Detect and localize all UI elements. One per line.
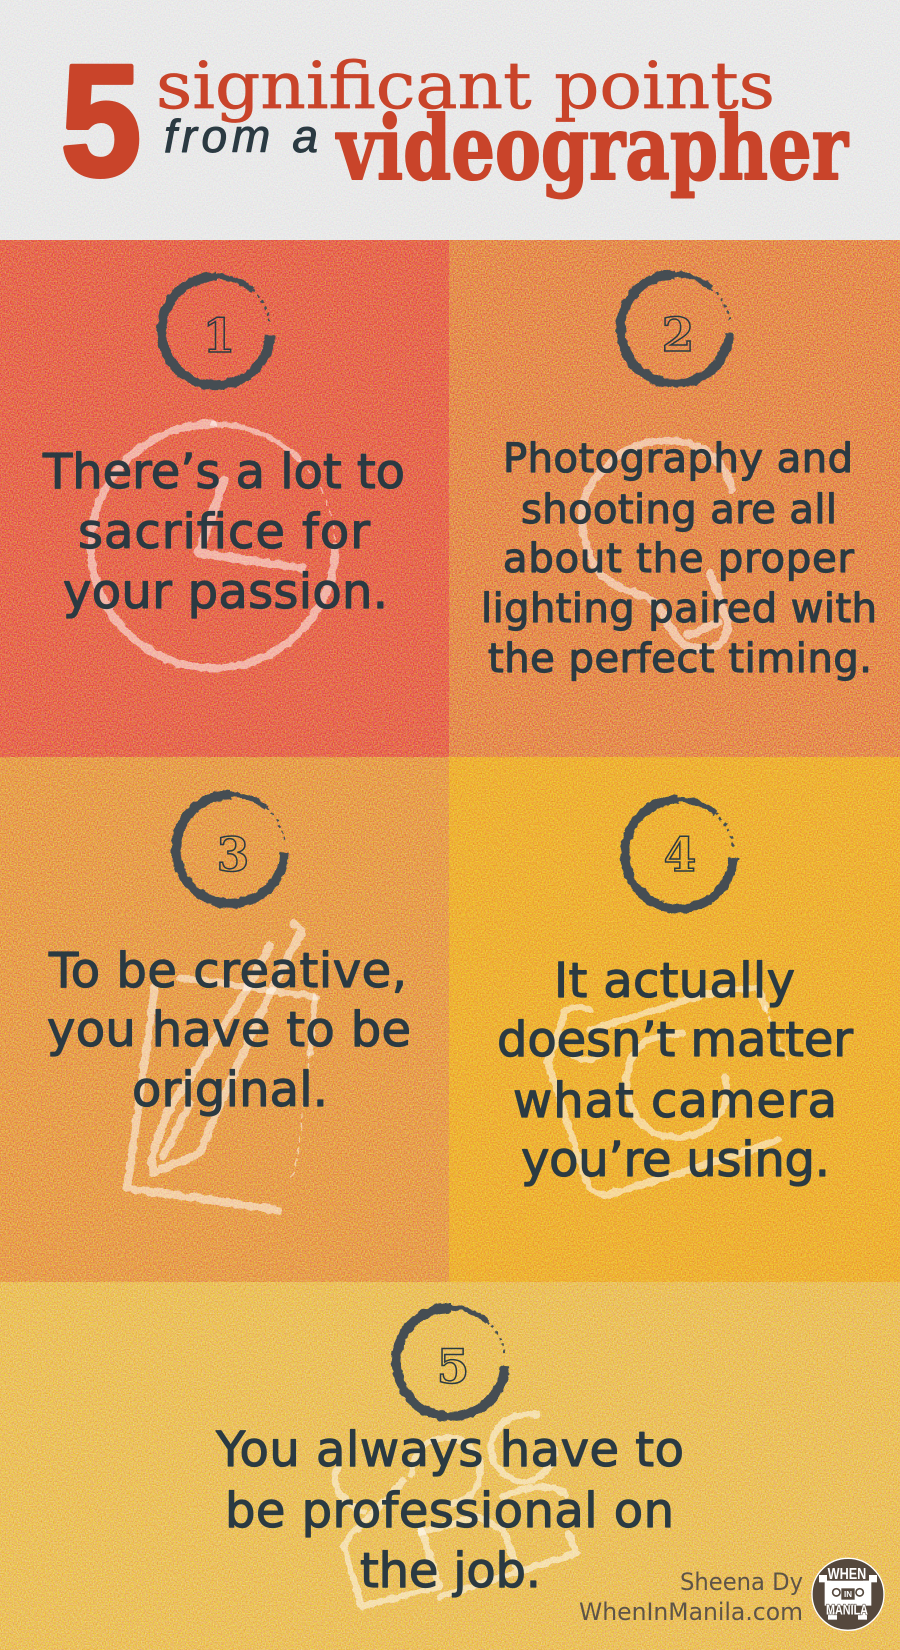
title line: significant points: significant points — [156, 49, 775, 124]
title — [61, 33, 849, 209]
text: point 3: you have to be — [47, 1002, 411, 1058]
panel: point 2 background — [449, 240, 900, 757]
logo: When In Manila jeepney: IN — [844, 1590, 852, 1599]
text: point 1 — [42, 444, 405, 620]
text: point 4: It actually — [554, 953, 795, 1009]
number badge 4: 4 — [664, 828, 696, 883]
icon: camera — [548, 987, 787, 1195]
number badge 1 — [162, 276, 270, 385]
text: point 3: To be creative, — [48, 943, 407, 999]
credit — [579, 1568, 803, 1626]
text: point 2: lighting paired with — [481, 586, 877, 632]
panel: point 2 — [481, 274, 877, 682]
panel: point 1 background — [0, 240, 449, 757]
text: point 4: you’re using. — [521, 1132, 830, 1188]
logo: When In Manila jeepney: MANILA — [826, 1603, 868, 1619]
panel: point 3 background — [0, 757, 449, 1282]
icon: pencil and paper — [127, 923, 317, 1210]
text: point 5: be professional on — [225, 1483, 674, 1539]
text: point 2: about the proper — [503, 536, 855, 582]
text: point 4 — [497, 953, 853, 1188]
text: point 5 — [215, 1422, 684, 1599]
icon: light bulb swirl — [582, 441, 732, 649]
logo: When In Manila jeepney — [812, 1558, 884, 1630]
number badge 3 — [176, 794, 285, 903]
credit: WhenInManila.com — [579, 1598, 803, 1626]
text: point 3: original. — [132, 1062, 328, 1118]
panel: point 5 background — [0, 1282, 900, 1650]
text: point 1: There’s a lot to — [42, 444, 405, 500]
number badge 2 — [621, 274, 730, 383]
text: point 2: the perfect timing. — [488, 636, 872, 682]
panel: point 1 — [42, 276, 405, 668]
title numeral 5: 5 — [61, 33, 141, 209]
text: point 2: Photography and — [503, 436, 853, 482]
text: point 4: doesn’t matter — [497, 1012, 853, 1068]
text: point 5: You always have to — [215, 1422, 684, 1478]
number badge 2: 2 — [662, 308, 694, 363]
number badge 4 — [625, 799, 734, 908]
text: point 3 — [47, 943, 411, 1118]
credit: Sheena Dy — [680, 1568, 803, 1596]
logo: When In Manila jeepney: WHEN — [828, 1566, 866, 1583]
title: from a: from a — [164, 110, 318, 162]
text: point 2: shooting are all — [521, 487, 837, 533]
number badge 3: 3 — [217, 828, 249, 883]
icon: clock — [91, 424, 335, 668]
text: point 1: your passion. — [63, 564, 388, 620]
panel: point 5 — [215, 1307, 684, 1607]
text: point 1: sacrifice for — [78, 504, 370, 560]
panel: point 4 background — [449, 757, 900, 1282]
text: point 2 — [481, 436, 877, 682]
text: point 4: what camera — [513, 1073, 837, 1129]
icon: group of people — [335, 1414, 577, 1607]
number badge 5: 5 — [437, 1340, 469, 1395]
number badge 1: 1 — [203, 309, 235, 364]
panel: point 3 — [47, 794, 411, 1210]
text: point 5: the job. — [360, 1543, 541, 1599]
header background — [0, 0, 900, 240]
panel: point 4 — [497, 799, 853, 1195]
number badge 5 — [396, 1307, 505, 1416]
